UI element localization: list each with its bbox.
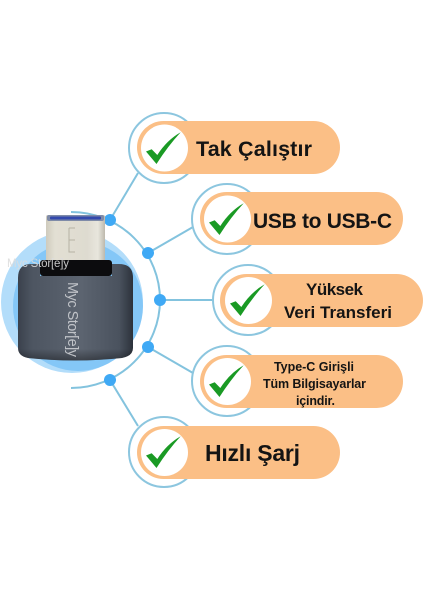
backdrop circles <box>1 231 143 373</box>
feature 4: Type-C Girişli Tüm Bilgisayarlar içindir.: Type-C Girişli <box>274 360 354 374</box>
icon: check <box>230 284 265 316</box>
adapter collar <box>40 260 112 276</box>
feature 2: USB to USB-C: USB to USB-C <box>253 210 392 233</box>
engraved brand: Myc Stor[e]y <box>64 282 80 358</box>
adapter body <box>18 264 133 360</box>
feature 3: Yüksek Veri Transferi <box>213 265 423 335</box>
feature 3: Yüksek Veri Transferi: Yüksek <box>306 280 364 299</box>
connector arc and lines <box>71 173 213 426</box>
feature 3: Yüksek Veri Transferi: Veri Transferi <box>284 303 392 322</box>
feature 1: Tak Çalıştır <box>129 113 340 183</box>
feature 4: Type-C Girişli Tüm Bilgisayarlar içindir.: içindir. <box>296 394 335 408</box>
feature 1: Tak Çalıştır: Tak Çalıştır <box>196 137 313 161</box>
icon: check <box>209 203 244 235</box>
feature 2: USB to USB-C <box>192 184 403 254</box>
feature 4: Type-C Girişli Tüm Bilgisayarlar içindir. <box>192 346 403 416</box>
feature 5: Hızlı Şarj <box>129 417 340 487</box>
icon: check <box>146 436 181 468</box>
icon: check <box>209 365 244 397</box>
icon: check <box>146 132 181 164</box>
feature 5: Hızlı Şarj: Hızlı Şarj <box>205 440 300 466</box>
product: USB adapter <box>7 215 133 360</box>
metal plug <box>46 215 105 262</box>
connector nodes <box>104 214 166 386</box>
watermark: Myc Stor[e]y <box>7 258 69 270</box>
feature 4: Type-C Girişli Tüm Bilgisayarlar içindir.: Tüm Bilgisayarlar <box>263 377 366 391</box>
